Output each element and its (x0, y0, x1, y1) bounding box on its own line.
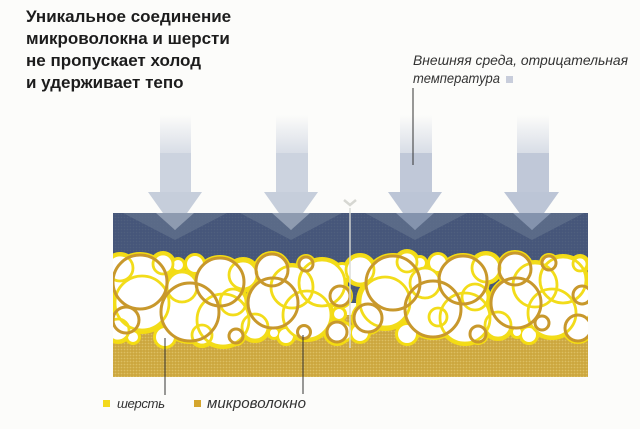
wool mass interior (107, 252, 591, 346)
label: outer environment (413, 52, 632, 86)
label: outer environment: температура (413, 70, 500, 86)
layer: inner fabric (113, 315, 588, 377)
centre fold (344, 200, 356, 348)
layer: outer fabric (113, 213, 588, 303)
arrow 4 (504, 115, 559, 230)
fibre layer (107, 252, 591, 346)
leader line: wool (164, 338, 166, 395)
arrow 1 (148, 115, 202, 230)
legend: wool: шерсть (117, 396, 165, 411)
icon: cold swatch (506, 76, 513, 83)
heading: и удерживает тепо (26, 73, 184, 92)
wool fibres (107, 252, 587, 346)
arrow 3 (388, 115, 442, 230)
chevrons under arrows (123, 213, 584, 240)
arrow 2 (264, 115, 318, 230)
leader line: microfibre (302, 335, 304, 394)
wool mass outline (107, 252, 591, 346)
label: outer environment: Внешняя среда, отрицательная (413, 52, 629, 68)
heading: не пропускает холод (26, 51, 201, 70)
heading: Уникальное соединение (26, 7, 231, 26)
leader line: outer environment (412, 88, 414, 165)
legend: microfibre: микроволокно (207, 396, 306, 412)
heading: микроволокна и шерсти (26, 29, 230, 48)
microfibre rings (113, 253, 591, 343)
